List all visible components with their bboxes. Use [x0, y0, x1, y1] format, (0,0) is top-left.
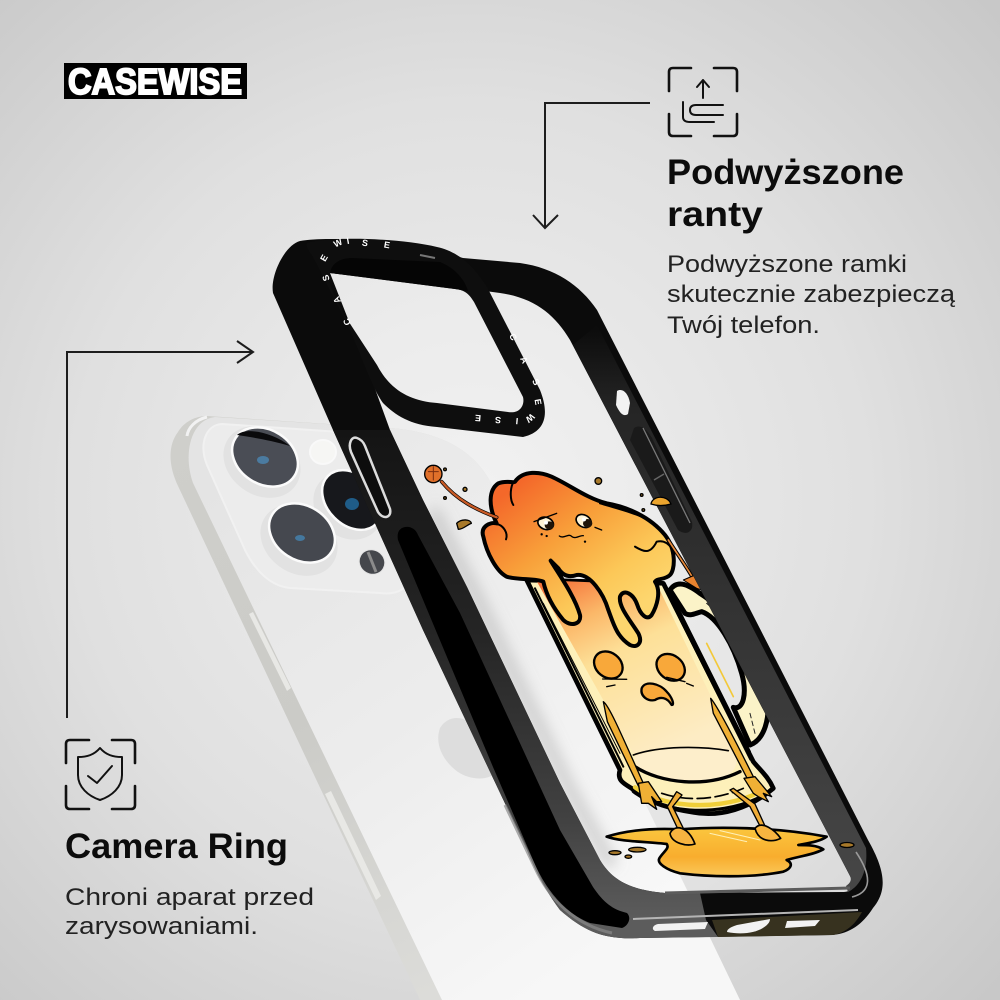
apple logo [438, 718, 498, 778]
ring lettering: A [331, 294, 343, 305]
puddle highlight [710, 831, 760, 842]
handle hatch marks [707, 603, 755, 733]
icon: raised edges [669, 68, 737, 136]
charging and speaker ports [653, 919, 820, 933]
text: raised edges description: Podwyższone ramki [667, 251, 907, 278]
camera bump [203, 411, 410, 593]
mug side arms [603, 698, 772, 809]
heading: Podwyższone ranty [667, 153, 904, 234]
droplets on bumper [651, 497, 854, 848]
ring highlight [420, 255, 435, 258]
ring lettering: E [475, 413, 481, 423]
logo: CASEWISE: CASEWISE [68, 61, 242, 102]
ring lettering: E [533, 398, 543, 406]
phone side buttons [249, 612, 381, 900]
mug eyes and mouth [589, 646, 690, 705]
text: camera ring description: zarysowaniami. [65, 913, 258, 940]
corner bezel highlight [852, 852, 868, 897]
text: raised edges description: skutecznie zabezpieczą [667, 281, 956, 308]
arrow: camera ring pointer [67, 341, 253, 718]
foam with drips [483, 473, 674, 646]
mug handle [670, 584, 768, 745]
ring lettering: A [518, 355, 530, 366]
ring lettering: E [318, 253, 330, 263]
ring lettering: E [383, 240, 391, 250]
ring lettering: S [530, 377, 542, 387]
mug legs and feet [667, 788, 765, 829]
icon: shield with check [66, 740, 135, 809]
phone: white iPhone behind the case [170, 411, 740, 1000]
ring lettering [318, 236, 543, 426]
left button pill [350, 438, 390, 517]
heading: Podwyższone ranty: Podwyższone [667, 153, 904, 192]
ring lettering: C [507, 332, 519, 343]
arm with fist [425, 465, 497, 517]
arrow: raised edges pointer [533, 103, 650, 228]
ring lettering: S [495, 415, 501, 425]
ring lettering: S [361, 238, 369, 248]
text: raised edges description [667, 251, 956, 339]
ring lettering: W [332, 236, 344, 249]
illustration: melting beer mug character [425, 465, 827, 876]
dark top wall seen through the ring [330, 258, 468, 291]
case: black bumper frame [273, 239, 883, 938]
case: clear back panel [330, 273, 853, 893]
character face [534, 512, 602, 543]
ring lettering: I [346, 236, 350, 246]
ring lettering: C [341, 316, 353, 327]
case inner shadow [432, 510, 612, 866]
text: camera ring description [65, 884, 314, 940]
mug bottom and stripes [535, 588, 750, 799]
splash droplets [444, 468, 646, 858]
feet [670, 825, 781, 845]
foam curls [497, 483, 672, 551]
text: raised edges description: Twój telefon. [667, 312, 820, 339]
right bumper grey side [573, 325, 866, 892]
inner black slot [398, 527, 629, 928]
bumper glass highlight [505, 805, 612, 933]
puddle [607, 828, 827, 876]
text: camera ring description: Chroni aparat przed [65, 884, 314, 911]
camera ring [306, 236, 545, 437]
arm reaching to handle [668, 540, 713, 595]
bottom bumper [712, 912, 862, 937]
mug glass [527, 580, 773, 829]
lower left bumper [333, 430, 718, 938]
heading: Podwyższone ranty: ranty [667, 195, 764, 234]
ring lettering: W [523, 411, 536, 425]
ring lettering: I [515, 416, 519, 426]
side buttons on right bumper [616, 390, 692, 533]
heading: Camera Ring: Camera Ring [65, 827, 288, 866]
ring lettering: S [320, 273, 332, 283]
